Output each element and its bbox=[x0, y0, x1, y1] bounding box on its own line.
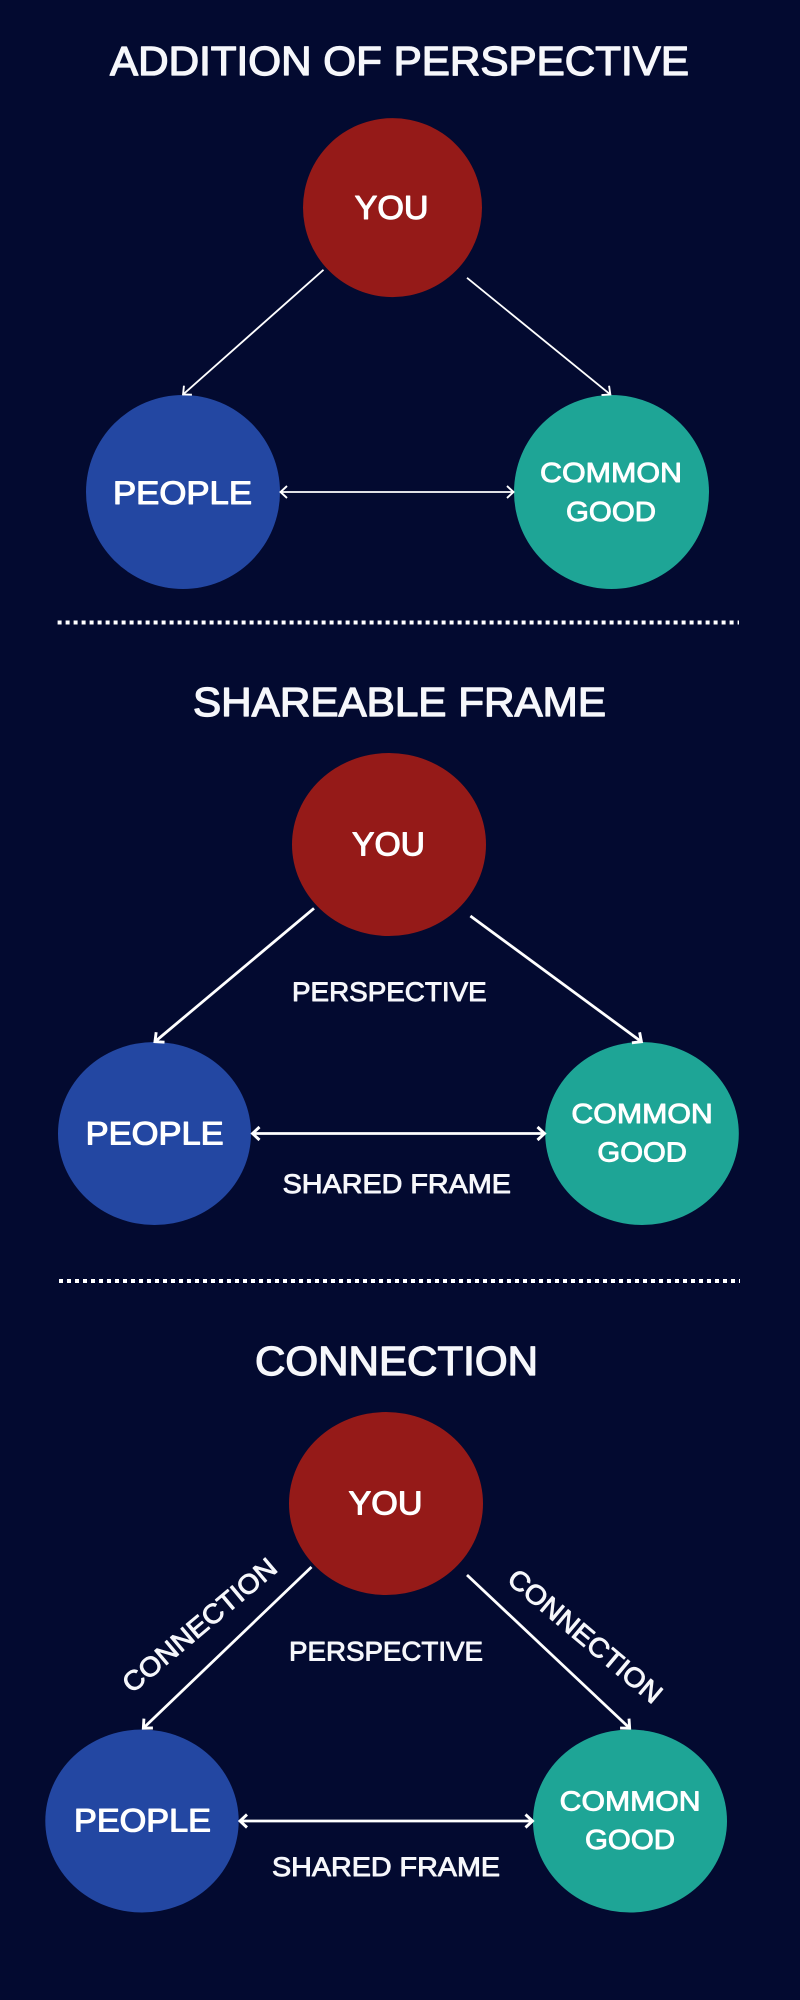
node: people bbox=[58, 1042, 251, 1225]
panel: shareable frame bbox=[58, 679, 739, 1225]
heading: shareable frame: SHAREABLE FRAME bbox=[193, 679, 606, 725]
label: connection left: CONNECTION bbox=[116, 1552, 283, 1699]
node: people: PEOPLE bbox=[113, 475, 252, 511]
node: common good bbox=[545, 1042, 739, 1225]
arrow: you to people bbox=[155, 908, 314, 1042]
arrow: you to people bbox=[183, 270, 324, 395]
node: you: YOU bbox=[352, 826, 425, 863]
node: people bbox=[45, 1730, 239, 1912]
label: perspective: PERSPECTIVE bbox=[292, 977, 487, 1007]
panel: addition of perspective bbox=[86, 38, 709, 589]
node: people: PEOPLE bbox=[74, 1803, 211, 1839]
node: common good: COMMON bbox=[540, 457, 682, 488]
node: common good: COMMON bbox=[571, 1098, 713, 1129]
node: common good: GOOD bbox=[597, 1137, 687, 1168]
arrow: people to common good bbox=[240, 1820, 533, 1822]
arrow: you to common good bbox=[470, 916, 642, 1042]
node: common good: COMMON bbox=[560, 1786, 700, 1816]
arrow: people to common good bbox=[280, 491, 514, 493]
node: common good bbox=[514, 395, 709, 589]
node: you bbox=[303, 118, 482, 297]
arrow: you to people bbox=[143, 1567, 312, 1728]
node: you bbox=[292, 753, 486, 936]
node: you: YOU bbox=[348, 1485, 422, 1522]
label: perspective: PERSPECTIVE bbox=[289, 1636, 483, 1666]
node: people bbox=[86, 395, 280, 589]
arrow: people to common good bbox=[252, 1132, 545, 1135]
node: common good bbox=[533, 1730, 727, 1912]
label: shared frame: SHARED FRAME bbox=[283, 1169, 511, 1199]
arrow: you to common good bbox=[467, 278, 611, 395]
node: people: PEOPLE bbox=[86, 1115, 224, 1151]
panel: connection bbox=[45, 1338, 727, 1912]
node: you: YOU bbox=[355, 189, 429, 226]
heading: addition of perspective: ADDITION OF PERSPECTIVE bbox=[110, 38, 689, 84]
node: you bbox=[289, 1412, 483, 1595]
label: connection right: CONNECTION bbox=[502, 1563, 668, 1709]
node: common good: GOOD bbox=[566, 496, 656, 527]
label: shared frame: SHARED FRAME bbox=[272, 1852, 500, 1882]
node: common good: GOOD bbox=[585, 1824, 675, 1855]
heading: connection: CONNECTION bbox=[255, 1338, 538, 1384]
arrow: you to common good bbox=[467, 1575, 630, 1728]
